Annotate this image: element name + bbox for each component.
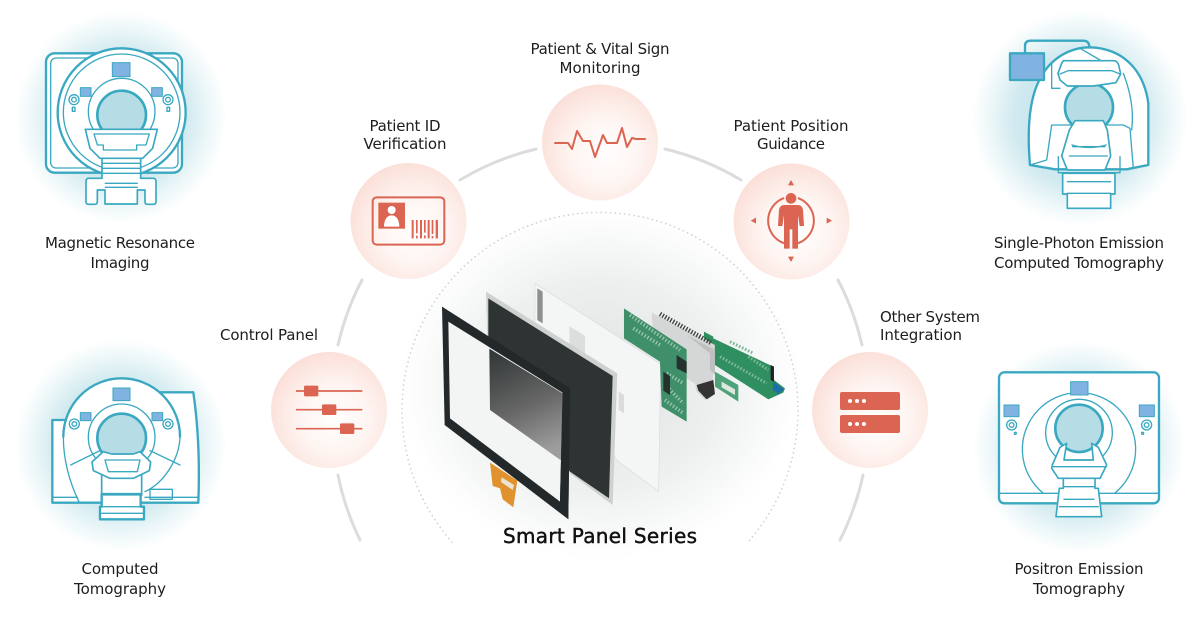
label: Patient and Vital Sign Monitoring: Monitoring xyxy=(560,59,640,77)
label: Other System Integration xyxy=(880,308,980,344)
label: CT xyxy=(73,560,166,598)
label: SPECT xyxy=(994,234,1164,272)
glow: MRI xyxy=(15,11,227,223)
display module xyxy=(486,292,617,505)
label: SPECT: Computed Tomography xyxy=(994,254,1164,272)
glow: PET xyxy=(973,341,1185,553)
dotted circle around product xyxy=(402,212,798,542)
panel: CT machine xyxy=(15,339,227,551)
label: Patient ID Verification xyxy=(364,117,446,153)
label: Control Panel: Control Panel xyxy=(220,326,318,344)
connecting arc segments xyxy=(338,149,863,540)
back plate xyxy=(535,283,661,492)
label: MRI xyxy=(45,234,195,272)
icon: person with direction arrows xyxy=(751,180,832,262)
icon: MRI scanner xyxy=(46,48,186,204)
panel: PET machine xyxy=(973,341,1185,553)
icon: PET scanner xyxy=(999,372,1159,517)
label: CT: Tomography xyxy=(73,580,166,598)
glow: CT xyxy=(15,339,227,551)
flexible cable xyxy=(490,463,517,507)
node: control panel xyxy=(271,352,387,468)
exploded product image xyxy=(442,283,785,519)
label: PET xyxy=(1014,560,1144,598)
icon: sliders xyxy=(296,386,362,434)
label: Patient ID Verification: Verification xyxy=(364,135,446,153)
label: PET: Positron Emission xyxy=(1014,560,1144,578)
label: Patient Position Guidance: Patient Position xyxy=(734,117,848,135)
label: Patient and Vital Sign Monitoring: Patient & Vital Sign xyxy=(530,40,670,58)
node: other system integration xyxy=(812,352,928,468)
label: Patient ID Verification: Patient ID xyxy=(370,117,440,135)
heat sink xyxy=(652,313,715,400)
touch glass window xyxy=(448,322,570,519)
label: Patient and Vital Sign Monitoring xyxy=(530,40,670,77)
label: MRI: Magnetic Resonance xyxy=(45,234,195,252)
label: CT: Computed xyxy=(82,560,158,578)
node: patient position guidance xyxy=(734,164,850,280)
icon: SPECT scanner xyxy=(1010,41,1148,208)
panel: MRI machine xyxy=(15,11,227,223)
icon: server stack xyxy=(840,392,900,433)
label: Patient Position Guidance xyxy=(734,117,848,153)
glow: SPECT xyxy=(972,10,1188,226)
icon: ID card xyxy=(373,197,444,245)
panel: central product shading xyxy=(400,210,800,560)
node: vital sign monitoring xyxy=(542,84,658,200)
icon: heartbeat line xyxy=(555,128,645,157)
main circuit board xyxy=(624,308,687,422)
label: PET: Tomography xyxy=(1032,580,1125,598)
panel: SPECT machine xyxy=(972,10,1188,226)
label: Other System Integration: Other System xyxy=(880,308,980,326)
icon: CT scanner xyxy=(52,378,199,519)
rear connector board xyxy=(704,332,785,402)
label: Patient Position Guidance: Guidance xyxy=(757,135,825,153)
label: SPECT: Single-Photon Emission xyxy=(994,234,1164,252)
title: Smart Panel Series: Smart Panel Series xyxy=(503,524,697,548)
touch glass frame xyxy=(442,307,570,519)
node: patient ID verification xyxy=(350,163,466,279)
label: Other System Integration: Integration xyxy=(880,326,962,344)
label: MRI: Imaging xyxy=(90,254,150,272)
